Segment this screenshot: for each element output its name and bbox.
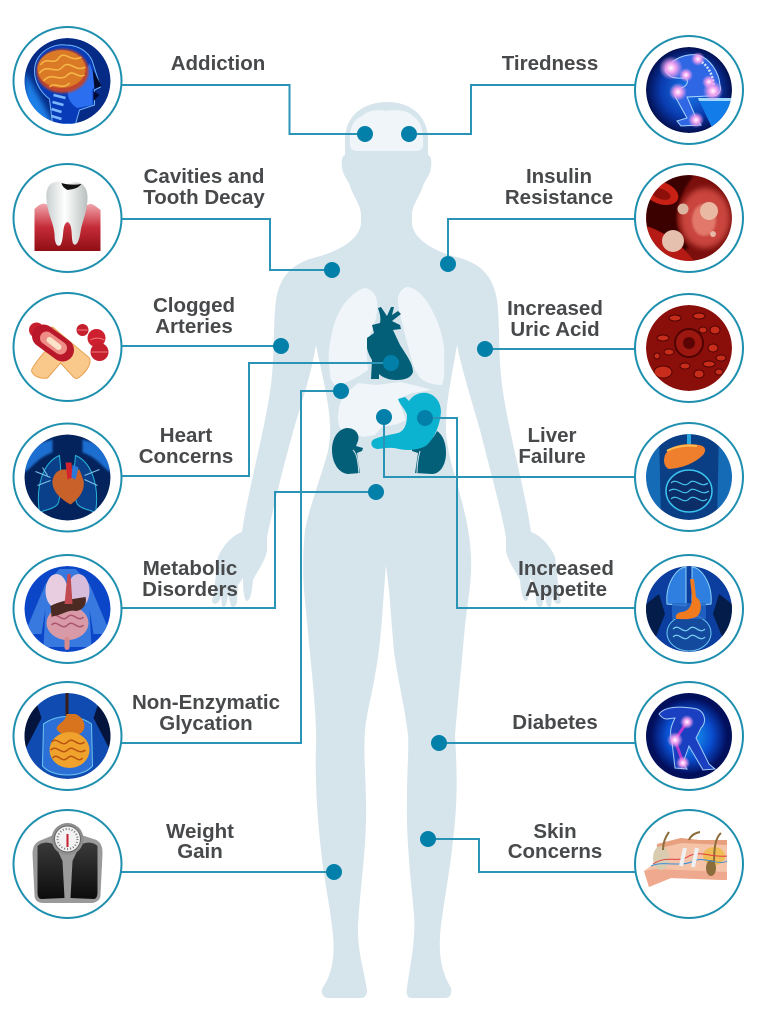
label: Non-Enzymatic Glycation: Glycation bbox=[159, 712, 253, 735]
stomach bbox=[371, 393, 441, 450]
icon: metabolic organs bbox=[14, 555, 122, 663]
label: Addiction: Addiction bbox=[171, 52, 265, 75]
icon: clogged artery bbox=[14, 293, 122, 401]
label: Cavities and Tooth Decay: Tooth Decay bbox=[143, 186, 265, 209]
label: Insulin Resistance: Insulin bbox=[526, 165, 592, 188]
label: Insulin Resistance: Resistance bbox=[505, 186, 613, 209]
label: Increased Uric Acid: Uric Acid bbox=[510, 318, 600, 341]
label: Skin Concerns: Concerns bbox=[508, 840, 602, 863]
label: Heart Concerns: Heart bbox=[160, 424, 212, 447]
label: Tiredness: Tiredness bbox=[502, 52, 598, 75]
body silhouette bbox=[212, 102, 561, 998]
icon: uric acid blood cells bbox=[635, 294, 743, 402]
icon: brain bbox=[14, 27, 122, 135]
icon: stomach bbox=[635, 555, 743, 663]
label: Increased Uric Acid: Increased bbox=[507, 297, 603, 320]
icon: liver and intestines bbox=[635, 423, 743, 531]
kidneys bbox=[332, 428, 446, 474]
label: Non-Enzymatic Glycation: Non-Enzymatic bbox=[132, 691, 280, 714]
liver bbox=[338, 382, 432, 437]
label: Increased Appetite: Increased bbox=[518, 557, 614, 580]
icon: digestive tract bbox=[14, 682, 122, 790]
label: Cavities and Tooth Decay: Cavities and bbox=[144, 165, 264, 188]
label: Metabolic Disorders: Metabolic bbox=[143, 557, 237, 580]
label: Increased Appetite: Appetite bbox=[525, 578, 607, 601]
icon: weighing scale bbox=[14, 810, 122, 918]
label: Diabetes: Diabetes bbox=[512, 711, 598, 734]
label: Heart Concerns: Concerns bbox=[139, 445, 233, 468]
label: Liver Failure: Failure bbox=[518, 445, 586, 468]
icon: tiredness figure bbox=[635, 36, 743, 144]
icon: skin cross-section bbox=[635, 810, 743, 918]
lungs bbox=[329, 287, 444, 387]
connector lines bbox=[120, 85, 636, 872]
heart bbox=[367, 307, 413, 380]
icon: diabetes joint pain bbox=[635, 682, 743, 790]
label: Weight Gain: Weight bbox=[166, 820, 234, 843]
label: Clogged Arteries: Arteries bbox=[155, 315, 233, 338]
marker dots bbox=[273, 126, 493, 880]
brain bbox=[350, 110, 423, 151]
icon: heart and lungs bbox=[14, 424, 122, 532]
icon: insulin resistance blood bbox=[635, 164, 743, 272]
label: Skin Concerns: Skin bbox=[533, 820, 577, 843]
label: Liver Failure: Liver bbox=[528, 424, 576, 447]
icon: tooth bbox=[14, 164, 122, 272]
label: Metabolic Disorders: Disorders bbox=[142, 578, 238, 601]
label: Clogged Arteries: Clogged bbox=[153, 294, 235, 317]
label: Weight Gain: Gain bbox=[177, 840, 223, 863]
